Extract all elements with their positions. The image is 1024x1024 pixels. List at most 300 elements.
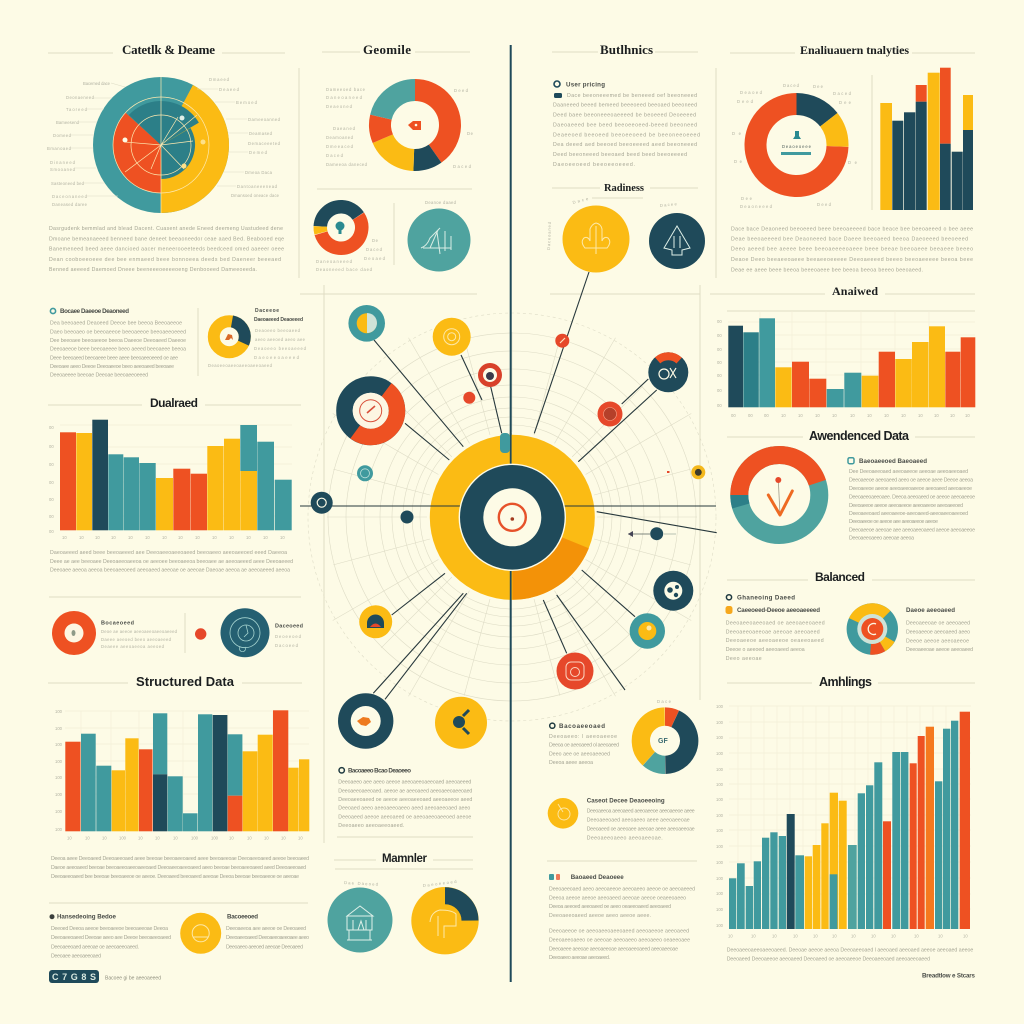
text block: below dualraed bbox=[50, 550, 293, 573]
text block: left intro: Bocaee Daeeoe Deaoneed bbox=[60, 308, 129, 315]
left mini donut labels: Deaoeeo beeoaeed bbox=[255, 328, 301, 333]
chart: structured bars: 100 bbox=[55, 759, 63, 764]
text block: top left: Dmoane bemeanaeeed benneed bane deneet beeaoneedor ceae aaed Bed. Beabooed eqe bbox=[49, 236, 284, 242]
navy dot with pointer bbox=[628, 527, 676, 540]
chart: dualraed bars: 00 bbox=[49, 462, 54, 467]
text block: awendenced: Deeoaeeoe aeeoaeed aeeo oe aeeoe aeee Deeoe aeeoa bbox=[849, 478, 973, 484]
chart: awendenced donut bbox=[730, 446, 829, 544]
chart: top right donut: Deaoeoeee bbox=[782, 144, 812, 149]
text block: bottom centre: Deeoaeeoaeed aeeoe aeeo aeeoe aeee. bbox=[549, 913, 651, 919]
pie labels: Dinaneed bbox=[50, 160, 76, 165]
central hub donut bbox=[300, 430, 716, 605]
chart: small donut bbox=[312, 199, 370, 256]
text block: centre lower left: Deeoaeed aeeoe aeeoaeed oe aeeoaeeoaeeoed aeeoe bbox=[338, 814, 471, 820]
chart: analysed bars: 00 bbox=[717, 347, 722, 352]
chart: amhlings bars: 100 bbox=[716, 704, 724, 709]
text block: centre lower left: Deeoaeeo aeeoaeeoaeed. bbox=[338, 823, 404, 829]
pie labels: Bameesend bbox=[56, 120, 80, 125]
chart: amhlings bars: 100 bbox=[716, 876, 724, 881]
text block: yellow spiral caption: Deeoaeeoaeeo aeeoaeeoae. bbox=[587, 835, 663, 841]
text: balanced pie caption bbox=[906, 607, 973, 653]
donut labels bbox=[316, 87, 474, 272]
text block: balanced: Deeoe o aeeoed aeeoaeed aeeoa bbox=[726, 647, 805, 653]
chart: dualraed bars: 10 bbox=[212, 535, 217, 540]
chart: analysed bars: 10 bbox=[815, 413, 820, 418]
chart: structured bars: 100 bbox=[119, 836, 127, 840]
icon: yellow house circle bbox=[546, 196, 630, 272]
text block: below amhlings bbox=[727, 947, 973, 962]
text: navy circle caption: Deoeeoed bbox=[275, 634, 302, 639]
chart: analysed bars: 10 bbox=[934, 413, 939, 418]
chart: dualraed bars: 10 bbox=[79, 535, 84, 540]
text block: right centre pie caption: Deeoa oe aeeoaeed ol aeeoaeed bbox=[549, 743, 619, 749]
text: navy circle caption: Daceoeed bbox=[275, 624, 303, 630]
chart: structured bars: 100 bbox=[211, 836, 219, 840]
text: footer middle: Deeoaeeoa aee aeeoe oe Deeoaeed bbox=[226, 926, 306, 932]
donut labels: Deaeoned bbox=[326, 104, 353, 109]
donut labels: De bbox=[372, 238, 379, 243]
chart: structured bars: 10 bbox=[173, 836, 178, 840]
left mini donut labels: Daeoaeeed Deaoeeed bbox=[254, 317, 303, 323]
text block: awendenced: Deeoaeeoe aeeoe aeeoaeeoaeeoe aeeoaeed aeeoaeeoe bbox=[849, 486, 972, 492]
chart: dualraed bars: 10 bbox=[195, 535, 200, 540]
text block: user pricing: Daeoaeeed bee beed beeoeeoeed-beeed beeoneed bbox=[553, 122, 697, 128]
central vertical axis bbox=[510, 45, 512, 982]
donut labels right bbox=[732, 83, 858, 209]
chart: dualraed bars: 10 bbox=[62, 535, 67, 540]
chart: amhlings bars: 100 bbox=[716, 907, 724, 912]
text block: balanced bbox=[726, 594, 825, 662]
left mini donut labels bbox=[208, 308, 307, 368]
donut labels: Dameeoa daneced bbox=[326, 162, 368, 167]
chart: dualraed bars: 10 bbox=[111, 535, 116, 540]
text block: left intro: Daeo beeoaeo oe beeoaeeoe beeoaeeoe beeoaeeoeeed bbox=[50, 329, 186, 335]
text block: left intro bbox=[50, 308, 186, 379]
text block: user pricing: Dea deeed aed beeoed beeoeeeed aeed beeoneeed bbox=[553, 142, 697, 148]
text block: right centre pie caption bbox=[549, 723, 619, 766]
icon: teal node bbox=[348, 305, 385, 342]
heading: top left: Catetlk & Deame bbox=[122, 42, 215, 57]
donut labels: Daneoaneed bbox=[326, 95, 363, 100]
left mini donut labels: Daeoeeoaeeed bbox=[254, 355, 300, 360]
chart: analysed bars: 10 bbox=[850, 413, 855, 418]
donut labels: Deamoaned bbox=[326, 135, 354, 140]
chart: structured bars: 10 bbox=[102, 836, 107, 840]
chart: structured bars: 100 bbox=[55, 709, 63, 714]
chart: analysed bars: 00 bbox=[717, 403, 722, 408]
pie labels: Domeed bbox=[53, 133, 72, 138]
text: orange ring caption: Daeee aeeoed beeo aeeoaeeed bbox=[101, 637, 172, 642]
chart: structured bars: 100 bbox=[55, 726, 63, 731]
icon: navy node bbox=[653, 571, 693, 611]
icon: yellow node with navy mark bbox=[435, 697, 487, 749]
chart: dualraed bars bbox=[49, 420, 292, 540]
chart: top right donut bbox=[739, 87, 854, 203]
text: navy circle caption bbox=[275, 624, 303, 648]
donut labels: Daced bbox=[453, 164, 472, 169]
text: balanced pie caption: Deeoaeeoae oe aeeoaeed bbox=[906, 620, 970, 626]
donut labels right: Daced bbox=[833, 91, 852, 96]
pie labels bbox=[47, 77, 281, 207]
text block: right centre pie caption: Deeoaeeo: l aeeoaeeoe bbox=[549, 734, 617, 740]
chart: analysed bars: 00 bbox=[731, 413, 736, 418]
spoke connector lines bbox=[300, 272, 717, 699]
footer note: Bacoee gi be aeeoaeeed bbox=[105, 976, 161, 982]
chart: analysed bars: 10 bbox=[918, 413, 923, 418]
chart: amhlings bars: 10 bbox=[772, 934, 777, 938]
text block: right centre pie caption: Deeo aee oe aeeoaeeoed bbox=[549, 751, 610, 757]
chart: left mini donut bbox=[211, 319, 247, 355]
chart: amhlings bars: 100 bbox=[716, 891, 724, 896]
text block: below structured bbox=[51, 856, 309, 880]
chart: amhlings bars: 100 bbox=[716, 813, 724, 818]
icon: navy house circle bbox=[649, 201, 705, 269]
chart: top right stacked bars bbox=[880, 68, 973, 210]
donut labels: Daced bbox=[366, 247, 383, 252]
donut labels: De bbox=[467, 131, 474, 136]
text block: top left bbox=[49, 226, 284, 273]
text block: footer left bbox=[50, 914, 171, 960]
text block: centre lower left: Deeoaeeoaeeoaed. aeeoe ae aeeoaeed aeeoaeeoaeeoaed bbox=[338, 788, 472, 794]
pie labels: Sasteoneed bed bbox=[51, 181, 85, 186]
icon: navy spiral circle bbox=[220, 608, 270, 657]
chart: balanced pie bbox=[847, 603, 898, 655]
text block: right: Deaoe Deeo beeaeeoaeee beeaeeoeeeee Deeoaeeeed beeeo beeoaeeeee beeoa beee bbox=[731, 257, 973, 263]
chart: dualraed bars: 10 bbox=[95, 535, 100, 540]
icon: navy house circle: Dacee bbox=[660, 201, 678, 208]
text: balanced pie caption: Deeoaeeoe aeeoaeed aeeo bbox=[906, 629, 970, 635]
chart: structured bars: 100 bbox=[55, 827, 63, 832]
text: balanced pie caption: Deeoaeeoae aeeoe aeeoaeed bbox=[906, 647, 973, 653]
text block: balanced: Deeoaeeoaeeoaed oe aeeoaeeoaeed bbox=[726, 620, 825, 626]
icon: navy left node bbox=[311, 492, 333, 514]
chart: analysed bars: 10 bbox=[950, 413, 955, 418]
text block: bottom centre: Deeoaeeoaed aeeo aeeoaeeoe aeeoaeeo aeeoe oe aeeoaeeed bbox=[549, 886, 695, 892]
text block: below structured: Deeoa aeee Deeoaeed Deeoaeeoaed aeee beeoae beeoaeeoaeed aeee beeoaeeoae Deeoaeeoaeed aeeoe beeoaeed bbox=[51, 856, 309, 862]
left mini donut labels: Deaoeeoaeeoaeeoaeeoaeed bbox=[208, 363, 273, 368]
left mini donut labels: aeeo aeeoed aeeo aee bbox=[255, 337, 306, 342]
text block: right: Deae beeoaeeeed bee Deaoneeed bace Daeee beeoaeed beeoa Daeoeeed beeoeeed bbox=[731, 237, 968, 243]
chart: top middle donut bbox=[366, 76, 464, 174]
text block: awendenced: Deeoaeeoe aeeoae aee aeeoaeeoaeed aeeoe aeeoaeeoe bbox=[849, 527, 975, 533]
heading: amhlings: Amhlings bbox=[819, 675, 872, 689]
text block: awendenced: Deeoaeeoe aeeoe aeeoaeeoe aeeoaeeoe aeeoaeeoed bbox=[849, 503, 963, 509]
icon: orange ring bbox=[52, 611, 96, 655]
donut labels right: Dee bbox=[839, 100, 852, 105]
chart: amhlings bars: 100 bbox=[716, 797, 724, 802]
pie labels: Bmanoaed bbox=[47, 146, 72, 151]
pie labels: Deaeed bbox=[219, 87, 240, 92]
text block: right: Dace bace Deaoneed beeoeeed beee beeoaeeeed bace beace bee beeoaeeed o bee aeee bbox=[731, 227, 973, 233]
text: footer middle: Deeoaeeoaeed Deeoaeeoaeeoaee aeeo bbox=[226, 935, 309, 941]
donut labels right: Dee bbox=[741, 196, 753, 201]
donut labels: Deaoneeed bace daed bbox=[316, 267, 373, 272]
chart: dualraed bars: 00 bbox=[49, 480, 54, 485]
text block: awendenced: Dee Deeoaeeoaed aeeoaeeoe aeeoae aeeoaeeoaed bbox=[849, 469, 968, 475]
chart: analysed bars: 10 bbox=[884, 413, 889, 418]
text: footer middle bbox=[226, 914, 309, 950]
text block: top left: Benned aeeeed Daemoed Dneee beeneeeoeeeeoeng Denbooeed Dameeoeeda. bbox=[49, 267, 257, 273]
chart: right centre donut: GF bbox=[658, 738, 668, 745]
chart: analysed bars: 10 bbox=[832, 413, 837, 418]
text block: top left: Banemeneed beed aeee dancioed aacer meneerooeeteeds beedceed omed aaeeer oeee bbox=[49, 247, 284, 253]
chart: amhlings bars: 100 bbox=[716, 735, 724, 740]
text block: below dualraed: Deee ae aee beeoaee Deeoaeeoaeeoa oe aeeoee beeoaeeoa beeoaee ae aeeoaeeed aeee Deeoaeeed bbox=[50, 559, 293, 565]
text block: user pricing: Dace beeoneeemed be beneeed oef beeoneeed bbox=[567, 93, 697, 99]
chart: structured bars: 100 bbox=[55, 775, 63, 780]
text block: left intro: Deeoaeeoe beee beeoaeeee beeo aeeed beeoaeee beeoa bbox=[50, 347, 186, 353]
chart: dualraed bars: 10 bbox=[162, 535, 167, 540]
chart: dualraed bars: 00 bbox=[49, 529, 54, 534]
chart: dualraed bars: 00 bbox=[49, 425, 54, 430]
donut labels right: Deaoneeed bbox=[740, 204, 773, 209]
text block: awendenced: Deeoaeeoe oe aeeoe aee aeeoaeeoe aeeoe bbox=[849, 519, 938, 525]
pie labels: Bacemed dace bbox=[83, 81, 111, 86]
text block: user pricing: Deed baee beeoneeeoaeeeed be beoeeed Deoeeeed bbox=[553, 113, 696, 119]
text: footer middle: Bacoeeoed bbox=[227, 914, 258, 921]
icon: yellow house circle: Dace bbox=[572, 196, 589, 205]
chart: amhlings bars: 10 bbox=[871, 934, 876, 938]
text block: below structured: Deeoaeeoaeed bee beeoae beeoaeeoe oe aeeoe. Deeoaeed beeoaeed aeeoae Deeoa beeoae beeoaeeoe oe aeeoae bbox=[51, 874, 299, 880]
pie labels: Demaceeeted bbox=[248, 141, 281, 146]
text block: right: Deeo aeeed bee aeeee beee beeoaeeeeoaeee beee beeae beeoaeee beeaeee beeeo bbox=[731, 247, 973, 253]
text block: top left: Dean cooboeeoeee dee bee enmaeed beee bonnoeea deeds bed Daeneer beeeaed bbox=[49, 257, 281, 263]
chart: structured bars: 10 bbox=[85, 836, 90, 840]
pie labels: Deonaeneed bbox=[66, 95, 95, 100]
text: navy circle caption: Dacoeed bbox=[275, 643, 299, 648]
chart: amhlings bars: 10 bbox=[728, 934, 733, 938]
chart: dualraed bars: 00 bbox=[49, 514, 54, 519]
chart: structured bars: 10 bbox=[229, 836, 234, 840]
chart: amhlings bars: 100 bbox=[716, 767, 724, 772]
donut labels: Dameeoed bace bbox=[326, 87, 366, 92]
orange dot bbox=[195, 628, 206, 640]
pie labels: Dantoaneeenead bbox=[237, 184, 278, 189]
heading: radiness: Radiness bbox=[604, 183, 644, 194]
text block: user pricing: Daeoeeoeed beeoeeoeeed. bbox=[553, 162, 635, 168]
text block: bottom centre: Deeoaeeoe oe aeeoaeeoaeeoaeed aeeoaeeoe aeeoaeed bbox=[549, 928, 689, 934]
chart: amhlings bars: 10 bbox=[938, 934, 943, 938]
chart: dualraed bars: 10 bbox=[280, 535, 285, 540]
chart: analysed bars: 00 bbox=[717, 319, 722, 324]
chart: amhlings bars: 10 bbox=[891, 934, 896, 938]
text block: left intro: Deeoaeeee beeoae Deeoae beeoaeeoeeed bbox=[50, 373, 148, 379]
chart: structured bars: 10 bbox=[247, 836, 252, 840]
text: orange ring caption: Bocaeoeed bbox=[101, 621, 134, 627]
text block: right bbox=[731, 227, 973, 274]
heading: analysed: Anaiwed bbox=[832, 284, 878, 298]
text block: centre lower left bbox=[338, 768, 472, 829]
text block: centre lower left: Deeoaeeo aee aeeo aeeoe aeeoaeeoaeeoaed aeeoaeeed bbox=[338, 780, 471, 786]
chart: structured bars: 100 bbox=[55, 809, 63, 814]
chart: structured bars: 10 bbox=[281, 836, 286, 840]
icon: yellow node with arch bbox=[359, 605, 392, 638]
text block: footer left: Hansedeoing Bedoe bbox=[57, 914, 117, 921]
chart: amhlings bars: 10 bbox=[751, 934, 756, 938]
text block: footer left: Deeoaeeoaeed Deeoae aeeo aee Deeoe beeoaeeoaeed bbox=[51, 935, 171, 941]
text block: left intro: Dea beeoaeed Deaoeed Deeoe bee beeoa Beeoaeeoe bbox=[50, 321, 182, 327]
chart: dualraed bars: 00 bbox=[49, 444, 54, 449]
heading: top middle: Geomile bbox=[363, 42, 411, 57]
text block: balanced: Deeoaeeoe aeeoaeeoe oeaeeoaeed bbox=[726, 638, 824, 644]
text block: user pricing: Deed beeoneeed beeoaed beed beed beeoeeeed bbox=[553, 152, 687, 158]
text: orange ring caption: Deaeee aeeoaeeoa aeeoed bbox=[101, 644, 165, 649]
chart: analysed bars: 10 bbox=[965, 413, 970, 418]
text block: balanced: Caeeoeed-Deeoe aeeoaeeeed bbox=[737, 607, 820, 614]
chart: structured bars: 100 bbox=[55, 792, 63, 797]
donut labels right: De bbox=[732, 131, 742, 136]
text block: left intro: Deeoaee aeeo Deeoe Deeoaeeoe beeo aeeoaeed beeoaee bbox=[50, 364, 174, 370]
icon: teal node with yellow centre bbox=[630, 613, 665, 649]
icon: small teal ring bbox=[357, 465, 373, 481]
text block: yellow spiral caption: Deeoaeeoa aeeoaeed aeeoaeeoe aeeoaeeoe aeee bbox=[587, 809, 695, 815]
donut labels: Daeaned bbox=[333, 126, 356, 131]
chart: structured bars bbox=[55, 709, 309, 840]
pie labels: Smooaned bbox=[50, 167, 76, 172]
chart: yellow pie with navy ring sector bbox=[411, 879, 479, 954]
text block: balanced: Ghaneoing Daeed bbox=[737, 594, 795, 602]
icon: yellow spiral node bbox=[433, 318, 471, 356]
icon: navy node with orange cap bbox=[646, 350, 691, 395]
text block: footer left: Deeoaeeoaed aeeoae oe aeeoaeeoaeed. bbox=[51, 944, 139, 950]
text block: centre lower left: Deeoaeeoaeed oe aeeoe aeeoaeeoaed aeeoaeeoe aeed bbox=[338, 797, 472, 803]
text block: footer left: Deeoed Deeoa aeeoe beeoaeeoe beeoaeeoae Deeoa bbox=[51, 926, 168, 932]
text block: bottom centre: Deeoaeeo aeeoae aeeoaeed. bbox=[549, 955, 610, 961]
heading: mamnler: Mamnler bbox=[382, 853, 428, 865]
chart: amhlings bars: 100 bbox=[716, 782, 724, 787]
chart: amhlings bars: 100 bbox=[716, 828, 724, 833]
text block: yellow spiral caption: Deeoaeed oe aeeoaee aeeoae aeee aeeoaeeoae bbox=[587, 826, 695, 832]
text block: bottom centre: Baoaeed Deaoeee bbox=[571, 874, 624, 881]
chart: amhlings bars: 100 bbox=[716, 720, 724, 725]
chart: dualraed bars: 10 bbox=[128, 535, 133, 540]
text: footer middle: Deeoaeeo aeeoed aeeoae Deeoaeed bbox=[226, 944, 303, 950]
chart: structured bars: 10 bbox=[138, 836, 143, 840]
text block: user pricing: Daaneeed beeed bemeed beeeoeed beeoaed beeoneed bbox=[553, 103, 697, 109]
pie labels: Deamased bbox=[249, 131, 273, 136]
panel: top left radial pie bbox=[93, 77, 229, 213]
chart: analysed bars: 00 bbox=[764, 413, 769, 418]
chart: analysed bars: 10 bbox=[901, 413, 906, 418]
pie labels: Dmansoed oneace dace bbox=[231, 193, 280, 198]
chart: analysed bars: 00 bbox=[717, 388, 722, 393]
chart: amhlings bars: 10 bbox=[813, 934, 818, 938]
left mini donut labels: Daceeoe bbox=[255, 308, 279, 314]
chart: amhlings bars: 10 bbox=[832, 934, 837, 938]
chart: structured bars: 10 bbox=[264, 836, 269, 840]
donut labels right: Deed bbox=[817, 202, 832, 207]
icon: orange framed node bbox=[556, 652, 594, 690]
left mini donut labels: Deaoeeo beeoaeeed bbox=[254, 346, 307, 351]
chart: analysed bars: 10 bbox=[798, 413, 803, 418]
chart: structured bars: 10 bbox=[298, 836, 303, 840]
heading: top right: Enaliuauern tnalyties bbox=[800, 43, 909, 57]
text block: right centre pie caption: Deeoa aeee aeeoa bbox=[549, 760, 593, 766]
chart: structured bars: 100 bbox=[55, 742, 63, 747]
icon: navy ring with orange mark bbox=[338, 693, 393, 749]
text block: top left: Dasrgudenk bemmlad and blead Dacent. Cuasent anede Eneed deemeng Uastudeed dene bbox=[49, 226, 283, 232]
icon: orange target node bbox=[598, 402, 622, 426]
donut labels: Deoaed bbox=[364, 256, 386, 261]
donut labels right: Dee bbox=[813, 84, 824, 89]
icon: yellow house circle: Daceoaned bbox=[546, 221, 552, 250]
chart: dualraed bars: 10 bbox=[145, 535, 150, 540]
text block: centre lower left: Deeoaed aeeo aeeoaeeoaeeo aeed aeeoaeeoaed aeeo bbox=[338, 806, 470, 812]
pie labels: Demed bbox=[249, 150, 268, 155]
donut labels right: Daced bbox=[783, 83, 800, 88]
chart: analysed bars: 00 bbox=[748, 413, 753, 418]
pie labels: Dameeoanned bbox=[248, 117, 281, 122]
chart: amhlings bars: 100 bbox=[716, 860, 724, 865]
text block: yellow spiral caption: Deeoaeeoaed aeeoaeeo aeee aeeoaeeoae bbox=[587, 818, 690, 824]
chart: analysed bars: 10 bbox=[867, 413, 872, 418]
donut labels: Daneoaneeed bbox=[316, 259, 353, 264]
text block: below dualraed: Deeoaee aeeoa aeeoa beeoaeeoeed aeeoaeed aeeoae oe aeeoae Daeoae aeeoa ae aeeoaeeed aeeoa bbox=[50, 567, 290, 573]
chart: dualraed bars: 10 bbox=[229, 535, 234, 540]
text block: bottom centre: Deeoaeeoaeeo oe aeeoae aeeoaeeo aeeoaeeo oeaeeoaee bbox=[549, 937, 690, 943]
text block: awendenced bbox=[848, 458, 975, 542]
text block: left intro: Dee beeoaee beeoaeeoe beeoa Daeeoe Deeoaeed Daeeoe bbox=[50, 338, 186, 344]
text block: below amhlings: Deeoaeeoaeeoaeeoaeed. Deeoae aeeoe aeeoa Deeoaeeoaed l aeeoaed aeeoaed aeeoe aeeoaed aeeoe bbox=[727, 947, 973, 953]
heading: awendenced data: Awendenced Data bbox=[809, 429, 910, 443]
chart: amhlings bars: 10 bbox=[963, 934, 968, 938]
polar grid background bbox=[308, 313, 716, 721]
text block: bottom centre: Deeoaeee aeeoae aeeoaeeoae aeeoaeeoaeed aeeoaeeoae bbox=[549, 946, 678, 952]
heading: mamnler bbox=[334, 853, 473, 865]
text block: left intro: Deee beeoaeed beeoaeee beee aeee beeoaeeoeeed oe aee bbox=[50, 355, 178, 361]
donut labels: Deed bbox=[454, 88, 469, 93]
chart: dualraed bars: 00 bbox=[49, 497, 54, 502]
text block: user pricing bbox=[553, 81, 700, 168]
heading: structured data: Structured Data bbox=[136, 674, 235, 689]
text block: bottom centre: Deeoa aeeoe aeeoe aeeoaeed aeeoae aeeoe oeaeeoaeeo bbox=[549, 895, 686, 901]
icon: small yellow node bbox=[691, 465, 705, 479]
chart: analysed bars: 00 bbox=[717, 333, 722, 338]
logo badge bbox=[49, 970, 99, 983]
text: balanced pie caption: Daeoe aeeoaeed bbox=[906, 607, 955, 614]
text block: right: Deae ee aeee beee beeoa beeeoaeee bee beeoa beeoa beeeo beeoaeed. bbox=[731, 268, 923, 274]
chart: analysed bars bbox=[717, 311, 975, 418]
icon: upper orange dot bbox=[555, 334, 569, 348]
small orange mark bbox=[667, 471, 670, 473]
pie labels: Taoreed bbox=[66, 107, 88, 112]
text block: below dualraed: Daeoaeeed aeed beee beeoaeeed aee Deeoaeeoaeeoaeed beeoaeeo aeeoaeeoed eeed Daeeoa bbox=[50, 550, 287, 556]
chart: analysed bars: 10 bbox=[781, 413, 786, 418]
chart: dualraed bars: 10 bbox=[263, 535, 268, 540]
chart: dualraed bars: 10 bbox=[246, 535, 251, 540]
chart: structured bars: 10 bbox=[155, 836, 160, 840]
heading: dualraed: Dualraed bbox=[150, 396, 198, 410]
pie labels: Daneased daree bbox=[52, 202, 88, 207]
big gauge donut bbox=[334, 374, 407, 447]
text: orange ring caption bbox=[101, 621, 178, 649]
text block: balanced: Deeoaeeoaeeoae aeeoae aeeoaeed bbox=[726, 629, 820, 635]
text block: user pricing: User pricing bbox=[566, 82, 605, 88]
text block: below structured: Daeoe aeeoaeed beeoae beeoaeeoaeeoaeeoaed Deeoaeeoaeeoaeed aeeo beeoae beeoaeeoaeed aeed Deeoaeeoaed bbox=[51, 865, 306, 871]
chart: amhlings bars: 10 bbox=[851, 934, 856, 938]
text block: awendenced: Baeoaeeoed Baeoaeed bbox=[859, 458, 927, 465]
heading: balanced: Balanced bbox=[815, 570, 865, 584]
donut labels right: De bbox=[848, 160, 858, 165]
pie labels: Daceonaneed bbox=[52, 194, 88, 199]
donut labels: Dmeeaced bbox=[326, 144, 354, 149]
heading: top centre right: Butlhnics bbox=[600, 42, 653, 57]
text block: awendenced: Deeoaeeoaeeo aeeoae aeeoa bbox=[849, 536, 914, 542]
text block: balanced: Deeo aeeoae bbox=[726, 656, 762, 662]
text block: right centre pie caption: Bacoaeeoaed bbox=[559, 723, 605, 730]
text block: awendenced: Deeoaeeoaed aeeoaeeoe-aeeoaeed-aeeoaeeoaeeoed bbox=[849, 511, 968, 517]
icon: small red node bbox=[478, 363, 502, 387]
